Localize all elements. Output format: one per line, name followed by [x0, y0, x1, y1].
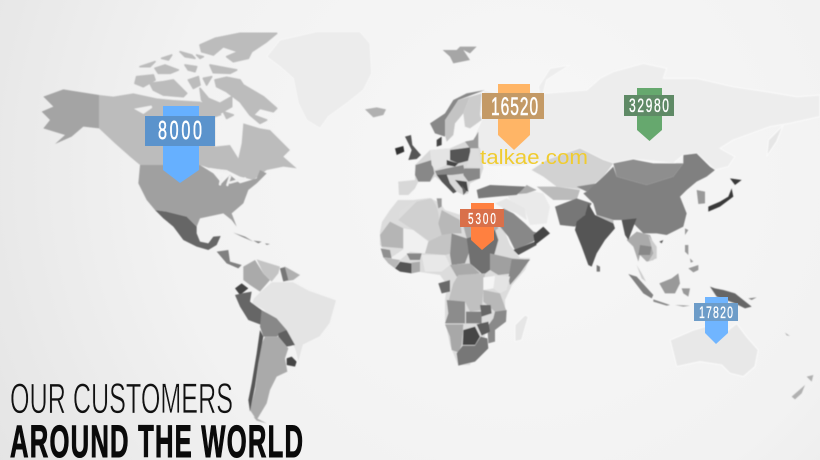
Russia and Central Asia: [443, 47, 820, 235]
Greece: [462, 185, 467, 195]
Kenya: [493, 275, 510, 293]
Uzbekistan region: [537, 187, 580, 200]
Spain: [398, 182, 415, 195]
Southern Asia, Southern Africa and Oceania: [438, 198, 813, 399]
Alaska: [42, 89, 99, 144]
Kazakhstan: [532, 148, 613, 190]
Morocco: [398, 201, 417, 220]
Zambia: [466, 312, 482, 323]
title: [10, 375, 303, 460]
Mali: [390, 228, 428, 260]
Romania: [463, 168, 480, 182]
Central African Republic: [450, 263, 480, 277]
Brazil: [252, 282, 337, 363]
marker: 17820: 17820: [699, 302, 733, 322]
Ireland: [395, 146, 404, 155]
Central America: [217, 250, 242, 268]
Borneo: [659, 273, 680, 293]
Russia: [475, 63, 820, 170]
Sudan: [467, 230, 498, 275]
Southeast Asia: [622, 218, 757, 308]
Africa land base: [380, 198, 530, 365]
Taiwan: [659, 240, 663, 243]
Botswana: [463, 327, 480, 345]
North Africa and Middle East: [380, 185, 550, 285]
Greenland: [267, 32, 372, 128]
Argentina: [250, 337, 288, 420]
Vietnam: [648, 235, 657, 262]
Paraguay: [278, 330, 295, 347]
Pakistan and Afghanistan: [555, 198, 592, 227]
Timor: [675, 305, 690, 307]
New Zealand: [785, 333, 813, 399]
title line 1: OUR CUSTOMERS: [10, 375, 233, 423]
Kyrgyzstan: [577, 183, 597, 192]
France: [415, 160, 434, 182]
Libya: [438, 210, 462, 235]
Sweden: [445, 97, 470, 142]
Sulawesi: [682, 288, 690, 297]
Angola: [445, 300, 465, 323]
Chile: [248, 330, 263, 412]
marker: 16520: 16520: [491, 93, 538, 121]
Malaysia: [637, 265, 646, 282]
Italy: [437, 174, 457, 193]
Europe land base: [398, 140, 483, 195]
marker: 8000: [145, 106, 215, 183]
watermark: talkae.com: [480, 147, 588, 169]
Caucasus: [518, 185, 537, 194]
Sumatra: [628, 274, 653, 298]
Europe: [395, 90, 485, 195]
Baltics: [465, 132, 478, 148]
Java: [653, 299, 670, 306]
Burkina Faso: [407, 253, 422, 260]
Australia: [670, 323, 758, 377]
Uganda: [483, 276, 495, 290]
Korea: [697, 190, 705, 204]
Central Europe: [435, 165, 465, 175]
Finland: [463, 93, 482, 128]
Oman: [533, 227, 550, 245]
marker: 32980: 32980: [629, 95, 669, 117]
Sri Lanka: [597, 265, 600, 272]
Tierra del Fuego: [253, 417, 267, 423]
Guinea: [383, 257, 400, 268]
Iran: [507, 190, 550, 225]
marker: 8000: 8000: [158, 115, 202, 145]
Iraq: [495, 198, 527, 220]
Guianas: [280, 267, 300, 282]
Nigeria region: [422, 255, 450, 272]
North America: [42, 32, 386, 227]
Kamchatka: [767, 125, 783, 157]
Mexico: [155, 210, 221, 250]
Somalia: [508, 259, 530, 285]
Namibia: [445, 324, 463, 352]
marker: 5300: 5300: [468, 210, 496, 228]
Japan: [708, 178, 742, 212]
New Guinea: [710, 287, 752, 308]
Myanmar: [622, 218, 637, 240]
Tunisia: [437, 198, 442, 208]
Mauritania: [380, 222, 403, 248]
Tanzania: [483, 290, 506, 312]
UK: [405, 135, 421, 160]
marker: 5300: [460, 203, 504, 250]
Caribbean: [233, 233, 270, 245]
Madagascar: [515, 315, 528, 342]
Canada: [99, 93, 297, 180]
Peru: [235, 292, 262, 325]
DR Congo: [448, 273, 485, 312]
Colombia: [243, 260, 270, 292]
Iceland: [365, 107, 386, 117]
Belarus and Ukraine: [467, 148, 482, 168]
Senegal: [381, 248, 392, 258]
Chad: [450, 233, 470, 265]
Ethiopia: [490, 253, 530, 275]
Venezuela: [257, 259, 280, 282]
Denmark: [437, 137, 442, 147]
Poland: [450, 147, 471, 163]
Egypt: [460, 212, 498, 238]
Cambodia: [638, 245, 652, 255]
Uruguay: [287, 357, 297, 367]
Czechia: [447, 160, 458, 167]
Bolivia: [260, 310, 287, 337]
South Africa: [457, 337, 488, 366]
marker: 32980: [624, 88, 674, 141]
Nepal: [595, 215, 613, 224]
Balkans: [455, 180, 468, 192]
Malawi: [480, 305, 492, 317]
New Britain: [748, 297, 757, 300]
Mozambique: [487, 310, 507, 343]
USA: [138, 165, 267, 227]
Germany: [430, 148, 450, 170]
China: [583, 153, 715, 235]
Philippines: [685, 228, 698, 272]
Algeria: [398, 198, 442, 242]
Yemen: [513, 242, 537, 255]
Niger: [425, 232, 452, 255]
Canadian Arctic islands: [135, 33, 277, 123]
marker: 17820: [694, 297, 738, 344]
Turkey: [477, 185, 527, 198]
Ghana: [412, 262, 420, 273]
Zimbabwe: [477, 322, 490, 336]
Ecuador: [235, 283, 248, 295]
Saudi Arabia: [500, 208, 540, 250]
India: [575, 203, 615, 267]
Svalbard: [443, 47, 477, 63]
Central and South America: [155, 210, 337, 423]
Ivory Coast: [395, 262, 412, 273]
Cameroon: [438, 280, 450, 293]
marker: 16520: [482, 84, 544, 150]
Thailand: [627, 232, 657, 262]
lakes: [137, 107, 245, 185]
Mongolia: [613, 159, 683, 185]
Norway: [430, 90, 485, 137]
